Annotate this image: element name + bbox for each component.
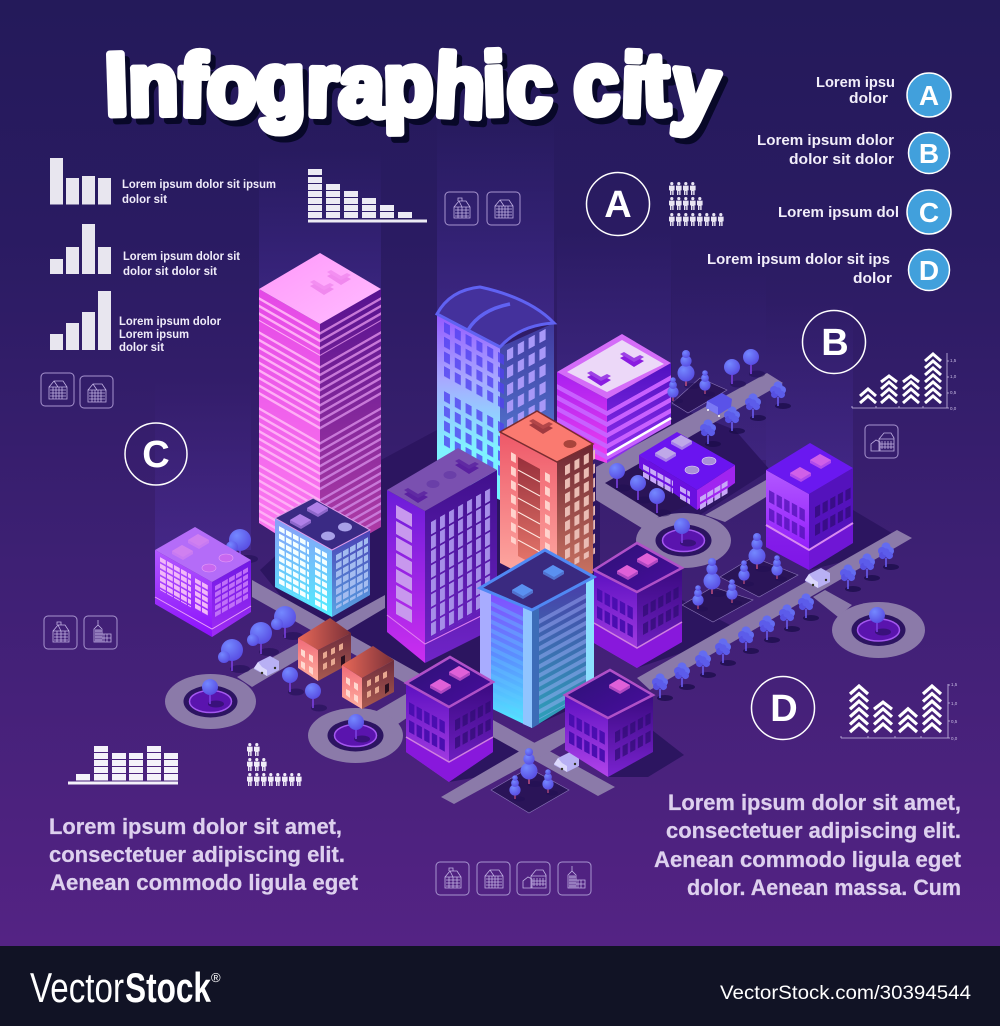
city ground shadows <box>260 405 895 782</box>
bar chart 3 text <box>119 314 221 354</box>
trees upper lot <box>667 349 791 447</box>
legend badge D: D <box>919 255 939 286</box>
marker B <box>802 310 866 374</box>
legend text A: Lorem ipsu <box>816 75 895 91</box>
house 2 <box>342 646 394 709</box>
segmented bar chart bottom <box>68 746 178 784</box>
legend text B: dolor sit dolor <box>789 152 894 168</box>
text block bottom left: consectetuer adipiscing elit. <box>49 842 345 867</box>
marker A <box>586 172 650 236</box>
building: tall dark purple <box>387 448 497 663</box>
text block bottom right: consectetuer adipiscing elit. <box>666 818 961 843</box>
chevron chart B: 1,0 <box>950 374 957 379</box>
trees lots <box>674 518 891 636</box>
traffic circles <box>165 513 925 763</box>
chevron chart B: 1,5 <box>950 358 957 363</box>
legend text D <box>707 252 892 287</box>
bar chart 3 text: dolor sit <box>119 340 164 354</box>
text block bottom left: Aenean commodo ligula eget <box>50 870 359 895</box>
bar chart 1 <box>50 158 111 204</box>
title: Infographic city <box>103 33 724 139</box>
building: salmon tower <box>500 411 595 592</box>
legend text D: dolor <box>853 271 892 287</box>
legend badge D <box>908 250 950 290</box>
building: violet left block <box>155 527 258 637</box>
text block bottom left <box>49 814 359 895</box>
building: blue glass tower <box>480 550 594 728</box>
legend badge B: B <box>919 138 939 169</box>
legend badge C: C <box>919 197 939 228</box>
footer id: VectorStock.com/30394544 <box>720 983 971 1004</box>
text block bottom right: Aenean commodo ligula eget <box>654 847 962 872</box>
icon: building pair top <box>445 192 520 225</box>
panel: city <box>155 253 899 802</box>
building: pink tower <box>259 253 381 562</box>
legend text A <box>816 75 895 107</box>
building: purple center right <box>594 543 682 668</box>
vehicle: van long road <box>805 568 830 588</box>
building: white-roof violet block <box>557 334 671 463</box>
icon: building pair left upper <box>41 373 113 408</box>
bar chart 1 text <box>122 177 276 206</box>
marker D: D <box>770 688 798 730</box>
green lots <box>491 378 798 813</box>
icon: building pair left lower <box>44 616 117 649</box>
footer logo <box>30 964 221 1011</box>
vehicle: van upper road <box>706 393 732 417</box>
segmented bar chart top <box>308 169 427 222</box>
building: purple right block <box>766 443 853 570</box>
house 1 <box>298 618 351 681</box>
marker C: C <box>142 434 170 476</box>
legend badge A: A <box>919 80 939 111</box>
chevron chart D: 0,5 <box>951 719 958 724</box>
chevron chart D: 0,0 <box>951 736 958 741</box>
chevron chart D <box>841 682 958 741</box>
building: cyan block <box>275 498 370 617</box>
building: purple center left <box>406 657 493 782</box>
footer bar <box>0 946 1000 1026</box>
chevron chart B: 0,5 <box>950 390 957 395</box>
marker C <box>125 423 187 485</box>
text block bottom left: Lorem ipsum dolor sit amet, <box>49 814 342 839</box>
panel: bar chart list <box>50 158 276 354</box>
vehicle: van bottom road <box>554 752 579 772</box>
bar chart 2 text: Lorem ipsum dolor sit <box>123 249 240 263</box>
building: low violet block <box>639 432 735 512</box>
legend badge C <box>907 190 951 234</box>
bar chart 1 text: Lorem ipsum dolor sit ipsum <box>122 177 276 191</box>
bar chart 2 <box>50 224 111 274</box>
chevron chart B: 0,0 <box>950 406 957 411</box>
legend badge A <box>907 73 951 117</box>
bar chart 3 text: Lorem ipsum <box>119 327 189 341</box>
people chart A <box>669 182 724 226</box>
footer logo: Vector <box>30 964 124 1011</box>
legend <box>707 73 951 290</box>
legend text A: dolor <box>849 91 888 107</box>
chevron chart D: 1,0 <box>951 701 958 706</box>
text block bottom right: dolor. Aenean massa. Cum <box>687 875 961 900</box>
legend text B: Lorem ipsum dolor <box>757 133 894 149</box>
trees by houses <box>202 606 370 742</box>
trees by low block <box>609 463 671 516</box>
legend text C: Lorem ipsum dol <box>778 205 899 221</box>
legend text D: Lorem ipsum dolor sit ips <box>707 252 890 268</box>
marker A: A <box>604 184 632 226</box>
icon row bottom <box>436 862 591 895</box>
roads <box>237 373 912 804</box>
building: arched blue tower <box>437 287 554 500</box>
marker D <box>752 676 814 740</box>
footer logo: ® <box>211 970 221 985</box>
text block bottom right: Lorem ipsum dolor sit amet, <box>668 790 961 815</box>
light beams above buildings <box>155 120 853 550</box>
icon: building right <box>865 425 898 458</box>
bar chart 2 text <box>123 249 240 278</box>
trees bottom lot <box>509 748 558 802</box>
bar chart 1 text: dolor sit <box>122 192 167 206</box>
chevron chart D: 1,5 <box>951 682 958 687</box>
people chart bottom <box>247 743 302 786</box>
footer logo: Stock <box>125 964 211 1011</box>
bar chart 2 text: dolor sit dolor sit <box>123 264 217 278</box>
bar chart 3 <box>50 291 111 350</box>
bar chart 3 text: Lorem ipsum dolor <box>119 314 221 328</box>
marker B: B <box>821 322 849 364</box>
legend text B <box>757 133 894 168</box>
chevron chart B <box>852 353 957 411</box>
building: purple bottom <box>565 670 653 777</box>
trees along long road <box>652 542 899 701</box>
vehicle: van left road <box>254 656 279 676</box>
legend badge B <box>908 132 950 174</box>
text block bottom right <box>654 790 962 900</box>
